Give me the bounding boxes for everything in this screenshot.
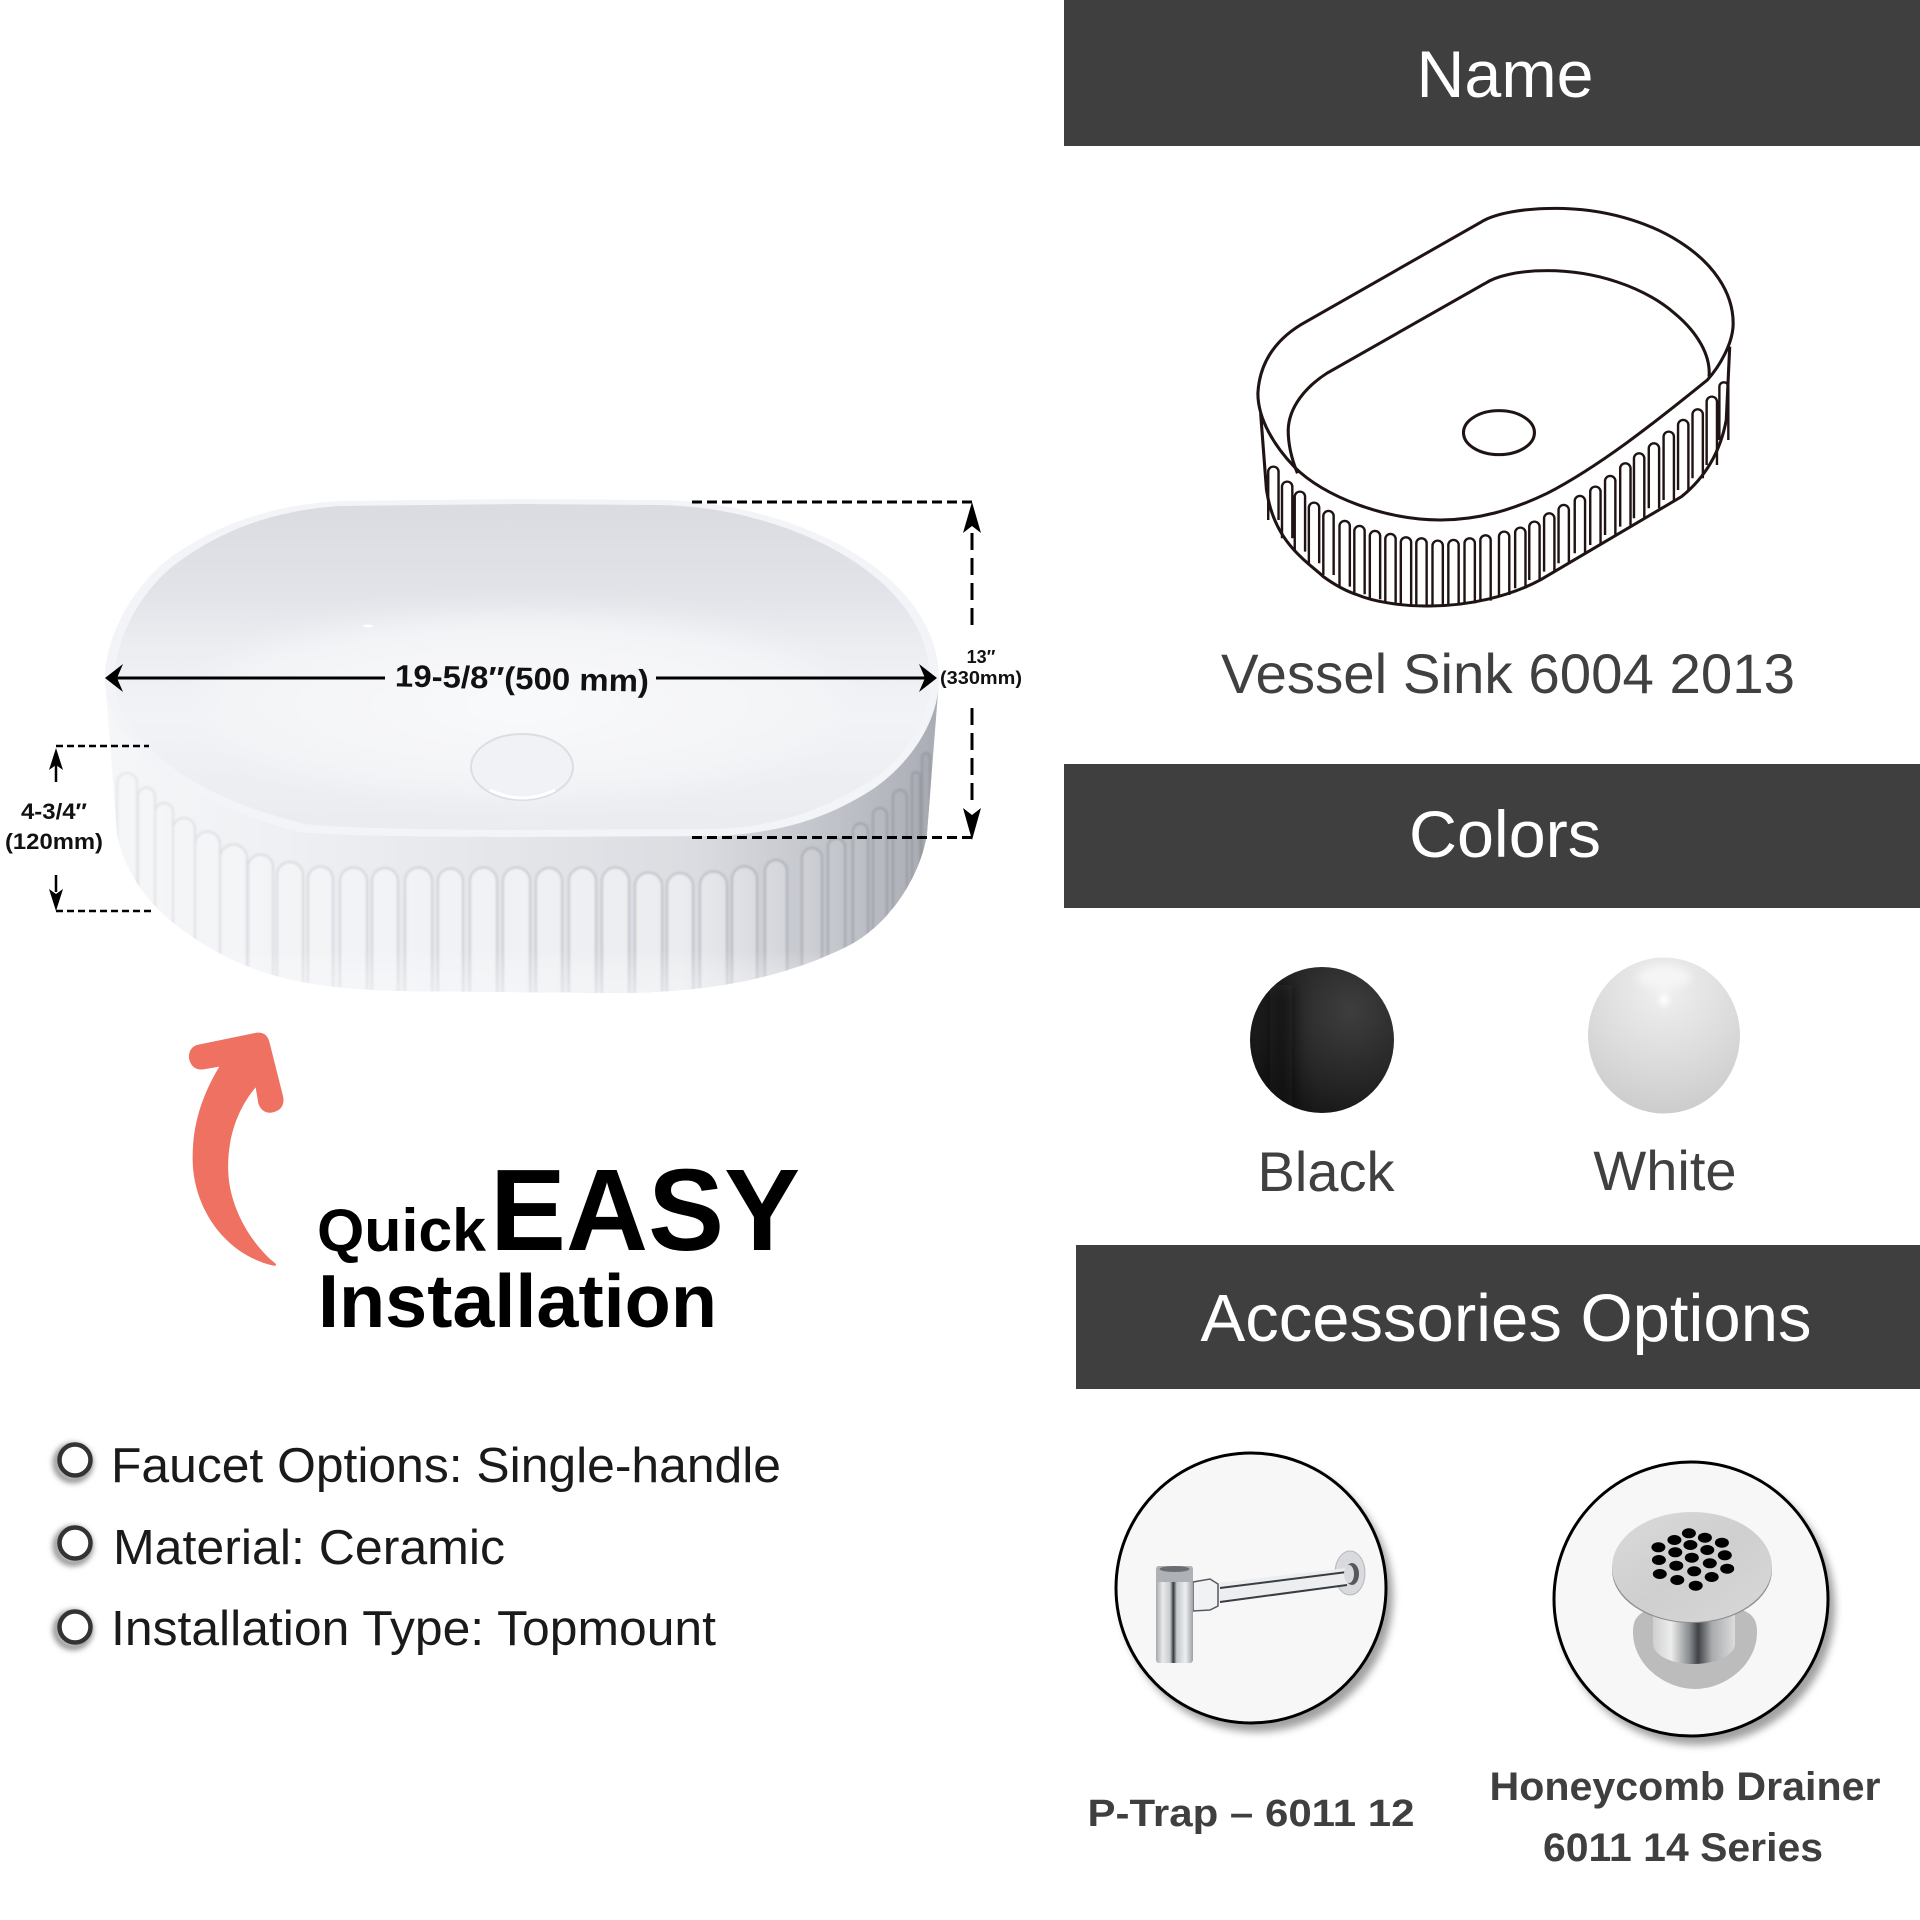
- dimension: width 19-5/8 inch: 19-5/8″(500 mm): [395, 658, 649, 699]
- accessory: honeycomb drainer: [1490, 1462, 1880, 1870]
- drawing: sink base: [1261, 347, 1730, 606]
- feature: faucet options: Faucet Options: Single-handle: [111, 1439, 781, 1493]
- label: honeycomb drainer: Honeycomb Drainer: [1490, 1765, 1880, 1809]
- drawing: flutes: [1268, 382, 1728, 606]
- heading: quick easy installation: Quick: [317, 1197, 487, 1264]
- label: p-trap: P-Trap – 6011 12: [1088, 1793, 1414, 1835]
- bullet 1: [56, 1444, 90, 1480]
- bullet 3: [56, 1612, 90, 1647]
- label: honeycomb drainer: 6011 14 Series: [1543, 1826, 1823, 1870]
- dimension: height 4-3/4 inch: [5, 746, 153, 911]
- dimension: height 4-3/4 inch: 4-3/4″: [21, 799, 87, 824]
- feature list: [56, 1439, 781, 1656]
- drawing: inner bowl: [1288, 271, 1709, 473]
- sink flutes: [100, 753, 940, 995]
- dimension: height 4-3/4 inch: (120mm): [5, 829, 103, 854]
- label: white: White: [1593, 1139, 1737, 1202]
- header bar: accessories options: [1076, 1245, 1920, 1389]
- accessory: p-trap: [1088, 1453, 1414, 1835]
- product photo: white fluted vessel sink: [100, 499, 940, 995]
- feature: installation type: Installation Type: Topmount: [111, 1602, 716, 1656]
- heading: quick easy installation: EASY: [490, 1145, 800, 1275]
- dimension: width 19-5/8 inch: [105, 658, 937, 699]
- drain cover: [471, 734, 573, 800]
- heading: quick easy installation: [317, 1145, 800, 1343]
- color swatch: white: [1588, 958, 1740, 1202]
- dimension: depth 13 inch: 13″: [967, 647, 996, 667]
- header bar: accessories options: Accessories Options: [1200, 1281, 1812, 1356]
- sink rim: [105, 499, 939, 837]
- drawing: outer rim: [1258, 208, 1733, 520]
- dimension: depth 13 inch: [692, 502, 1022, 840]
- bullet 2: [56, 1528, 90, 1563]
- header bar: name: Name: [1416, 37, 1594, 111]
- icon: p-trap pipe: [1156, 1551, 1365, 1663]
- heading: quick easy installation: Installation: [318, 1259, 717, 1343]
- line drawing of sink: [1258, 208, 1733, 606]
- icon: honeycomb drain: [1612, 1512, 1772, 1689]
- sink outer body: [105, 680, 939, 993]
- dimension: depth 13 inch: (330mm): [940, 668, 1022, 688]
- color swatch: black: [1250, 967, 1395, 1203]
- feature: material: Material: Ceramic: [113, 1521, 505, 1575]
- sink bowl floor: [202, 615, 842, 795]
- sink bowl interior: [115, 504, 930, 830]
- drawing: drain hole: [1463, 411, 1534, 455]
- product name: Vessel Sink 6004 2013: [1221, 642, 1795, 705]
- label: honeycomb drainer: [1490, 1765, 1880, 1870]
- header bar: colors: [1064, 764, 1920, 908]
- label: black: Black: [1258, 1140, 1395, 1203]
- icon: coral curved arrow: [189, 1033, 284, 1266]
- header bar: name: [1064, 0, 1920, 146]
- header bar: colors: Colors: [1409, 797, 1601, 871]
